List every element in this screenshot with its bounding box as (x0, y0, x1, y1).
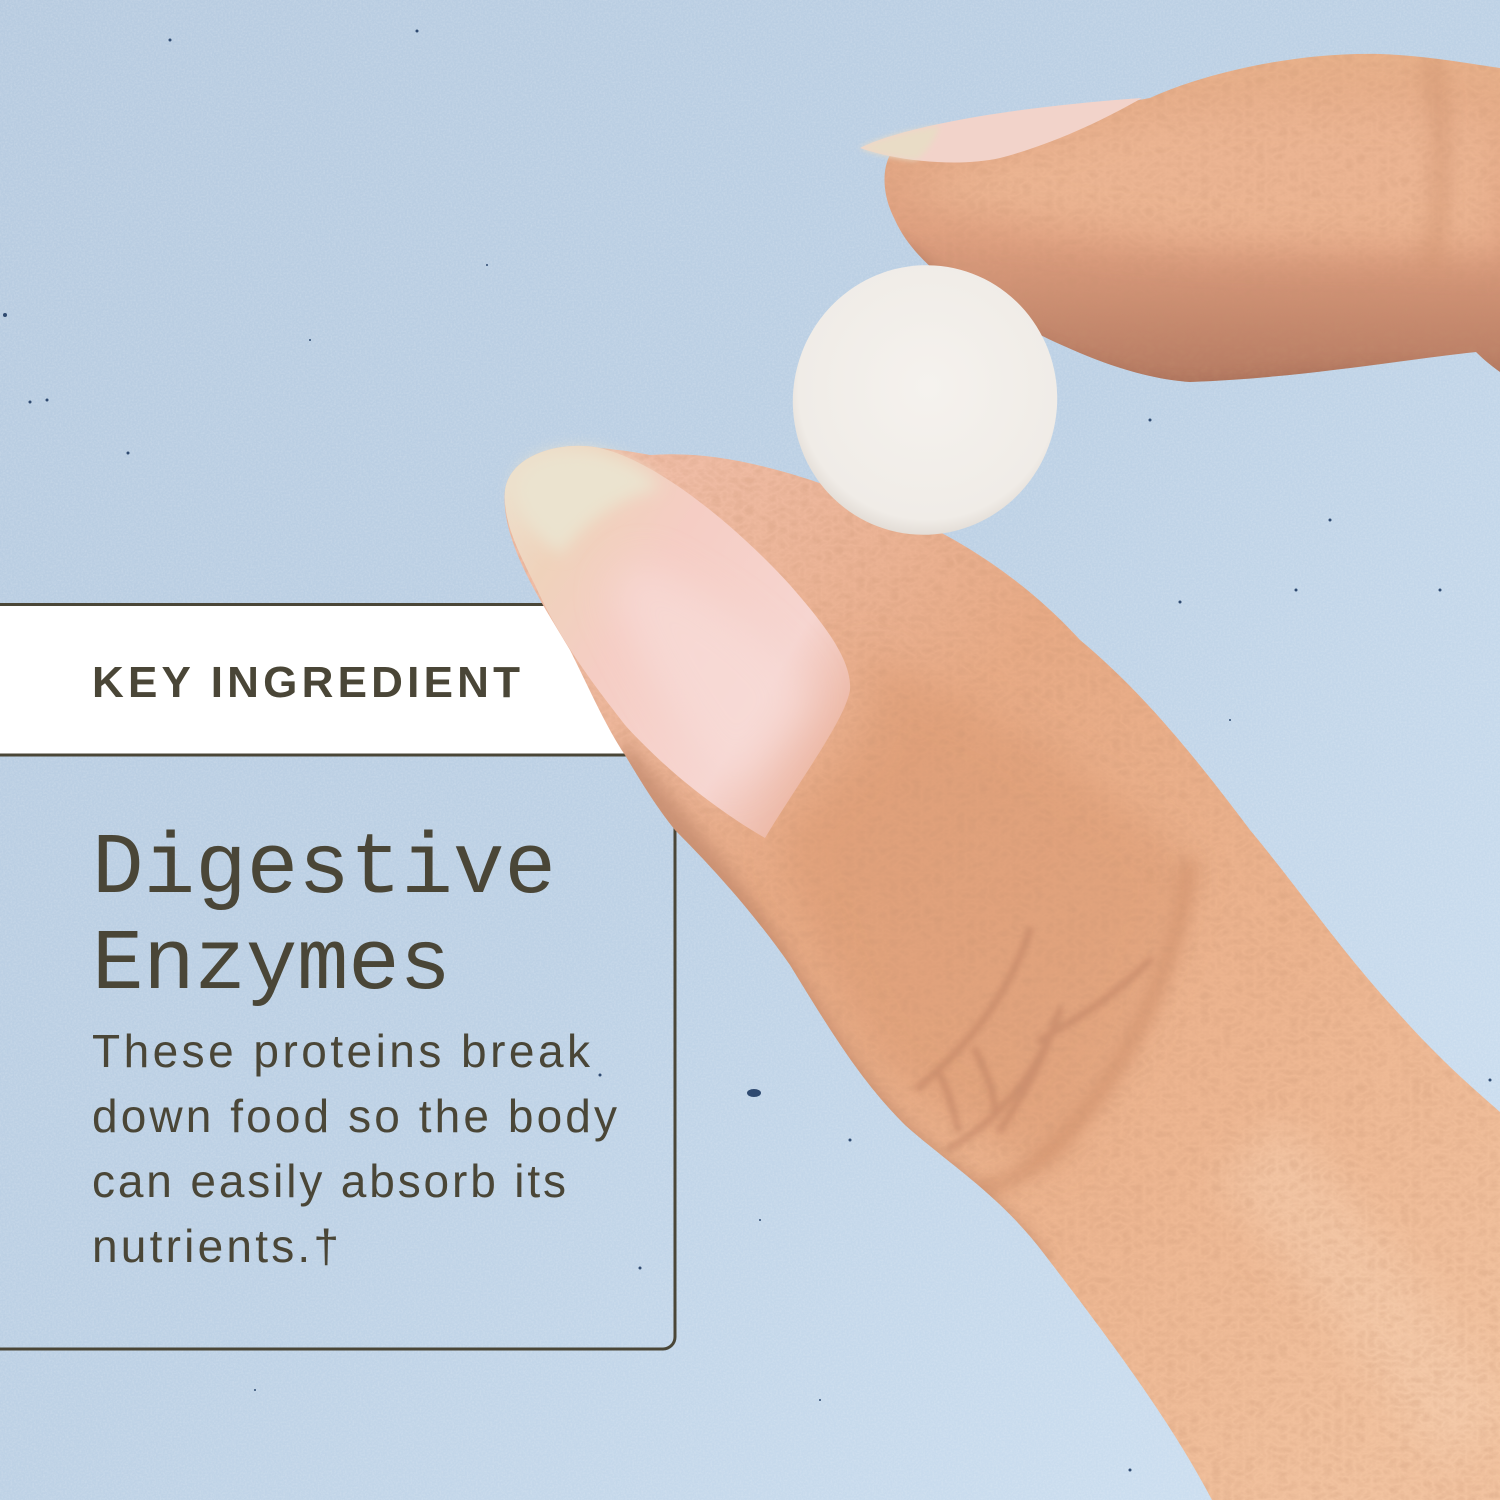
body text: can easily absorb its (92, 1155, 566, 1207)
heading: Digestive Enzymes (92, 820, 556, 1014)
body text: These proteins break (92, 1025, 591, 1077)
heading: Digestive Enzymes: Digestive (92, 820, 556, 918)
body text: nutrients.† (92, 1220, 339, 1272)
thumbnail (505, 446, 850, 838)
thumb (500, 440, 1500, 1500)
upper finger (860, 40, 1500, 400)
panel: description box outline (0, 755, 675, 1349)
heading: Digestive Enzymes: Enzymes (92, 916, 451, 1014)
label bar: key ingredient (0, 604, 660, 755)
body text (92, 1025, 617, 1272)
body text: down food so the body (92, 1090, 617, 1142)
pill (763, 235, 1087, 565)
label text: KEY INGREDIENT (92, 658, 520, 707)
upper fingernail (860, 98, 1142, 163)
